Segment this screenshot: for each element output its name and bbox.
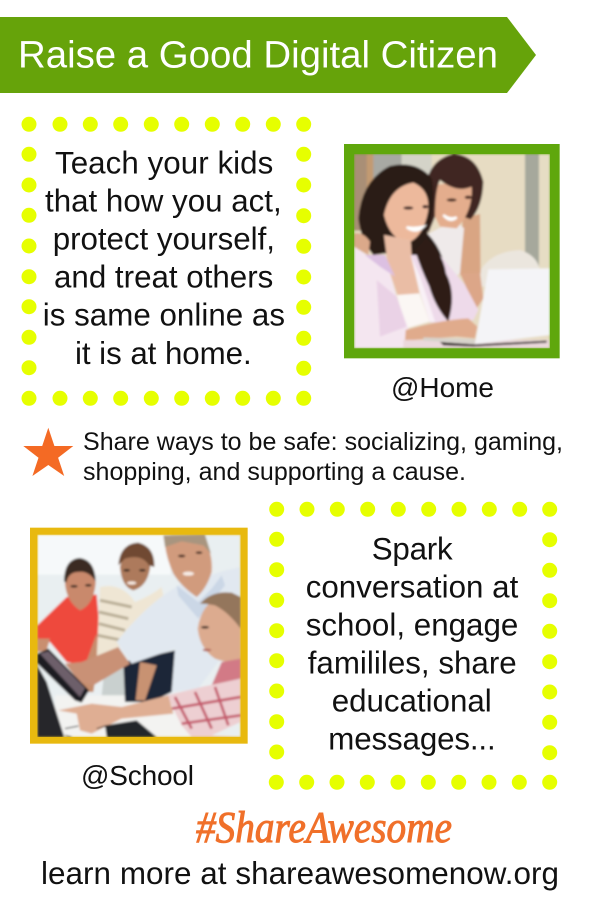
- panel text: spark conversation: educational: [332, 684, 492, 719]
- panel: teach your kids: [22, 117, 311, 406]
- panel text: spark conversation: famililes, share: [308, 646, 517, 680]
- panel text: teach your kids: and treat others: [54, 260, 273, 294]
- dotted border: home panel: [22, 117, 311, 406]
- panel text: teach your kids: that how you act,: [45, 183, 282, 218]
- dotted border: school panel: [269, 502, 557, 790]
- logo: #ShareAwesome: #ShareAwesome: [196, 803, 452, 852]
- girl: [460, 214, 481, 275]
- footer: learn more: learn more at shareawesomenow.org: [41, 856, 559, 891]
- laptop: [475, 268, 550, 344]
- icon: orange star: [23, 428, 73, 476]
- mother face and neck: [384, 183, 428, 243]
- arm and hand: [354, 233, 370, 255]
- title banner: [0, 17, 536, 93]
- tip text: share ways to be safe: shopping, and supporting a cause.: [83, 458, 466, 486]
- mother hair: [357, 163, 444, 258]
- panel text: spark conversation: Spark: [372, 531, 453, 566]
- computer screens and keyboard: [37, 649, 89, 703]
- caption: @Home: @Home: [391, 372, 494, 403]
- panel text: teach your kids: [43, 145, 285, 371]
- panel text: teach your kids: Teach your kids: [55, 145, 273, 180]
- teacher: [117, 567, 241, 692]
- mother shirt: [354, 247, 408, 348]
- panel text: spark conversation: conversation at: [306, 569, 519, 604]
- girl: [198, 597, 241, 662]
- panel text: teach your kids: protect yourself,: [53, 222, 275, 256]
- table: [403, 340, 550, 348]
- photo: teacher and students at computer: [30, 528, 248, 744]
- panel text: teach your kids: it is at home.: [75, 336, 252, 371]
- panel text: teach your kids: is same online as: [43, 298, 285, 332]
- panel: spark conversation: [269, 502, 557, 790]
- tip text: share ways to be safe: Share ways to be safe: socializing, gaming,: [83, 428, 563, 456]
- boy: [37, 595, 100, 669]
- panel text: spark conversation: messages...: [328, 722, 496, 756]
- woman: [95, 586, 164, 656]
- photo: mother and daughter at laptop: [344, 144, 560, 358]
- tip text: share ways to be safe: [83, 428, 563, 486]
- caption: @School: @School: [81, 760, 194, 791]
- title banner: Raise a Good Digital Citizen: [18, 34, 498, 76]
- panel text: spark conversation: [306, 531, 519, 756]
- panel text: spark conversation: school, engage: [306, 607, 518, 642]
